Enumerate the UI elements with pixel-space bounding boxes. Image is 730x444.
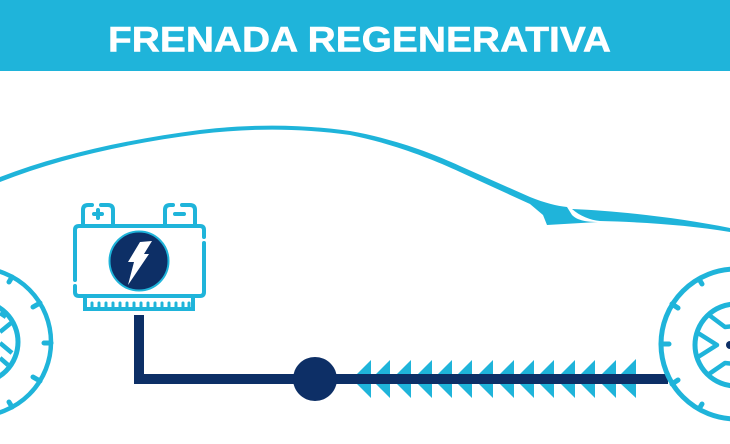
battery terminals [83, 205, 195, 224]
junction circle [293, 357, 337, 401]
battery case [75, 226, 204, 296]
title: FRENADA REGENERATIVA [108, 20, 611, 60]
battery lightning icon [110, 232, 168, 290]
dark connection line [139, 315, 668, 379]
battery [75, 205, 204, 309]
right wheel [661, 269, 730, 419]
battery base [85, 296, 193, 309]
left wheel [0, 268, 51, 416]
energy flow arrows [357, 359, 636, 398]
header band [0, 0, 730, 71]
car body outline [0, 126, 730, 232]
